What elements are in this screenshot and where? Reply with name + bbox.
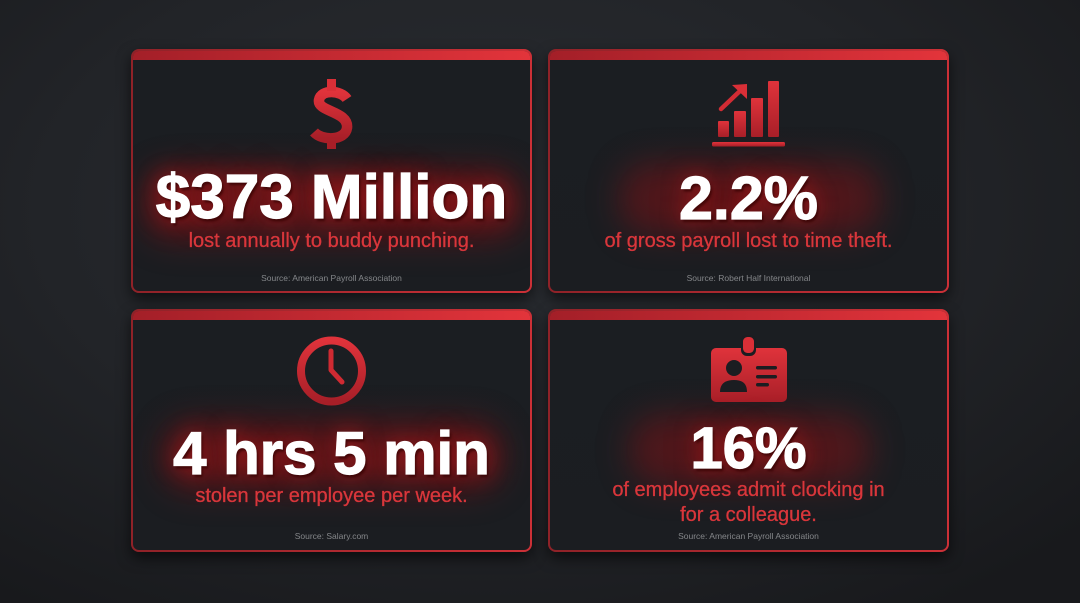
icon: ID badge xyxy=(711,337,787,402)
description: stolen per employee per week. xyxy=(195,485,468,507)
panel: time theft xyxy=(548,49,949,293)
description: of employees admit clocking in xyxy=(612,479,885,501)
panel: buddy punching xyxy=(131,49,532,293)
stat: 16%: 16% xyxy=(690,416,807,481)
panel: hours stolen xyxy=(131,309,532,552)
description: for a colleague. xyxy=(680,504,817,526)
stat: $373 Million: $373 Million xyxy=(156,163,507,232)
panel: clocking in for a colleague xyxy=(548,309,949,552)
icon: bar chart with arrow xyxy=(712,81,785,146)
source: Source: American Payroll Association xyxy=(678,531,819,541)
icon: dollar sign xyxy=(310,79,352,149)
source: Source: American Payroll Association xyxy=(261,273,402,283)
stat: 4 hrs 5 min: 4 hrs 5 min xyxy=(173,420,490,487)
icon: clock xyxy=(297,336,366,406)
source: Source: Robert Half International xyxy=(687,273,810,283)
stat: 2.2%: 2.2% xyxy=(679,164,818,232)
description xyxy=(612,479,885,526)
source: Source: Salary.com xyxy=(295,531,368,541)
description: lost annually to buddy punching. xyxy=(189,230,474,252)
description: of gross payroll lost to time theft. xyxy=(605,230,892,252)
